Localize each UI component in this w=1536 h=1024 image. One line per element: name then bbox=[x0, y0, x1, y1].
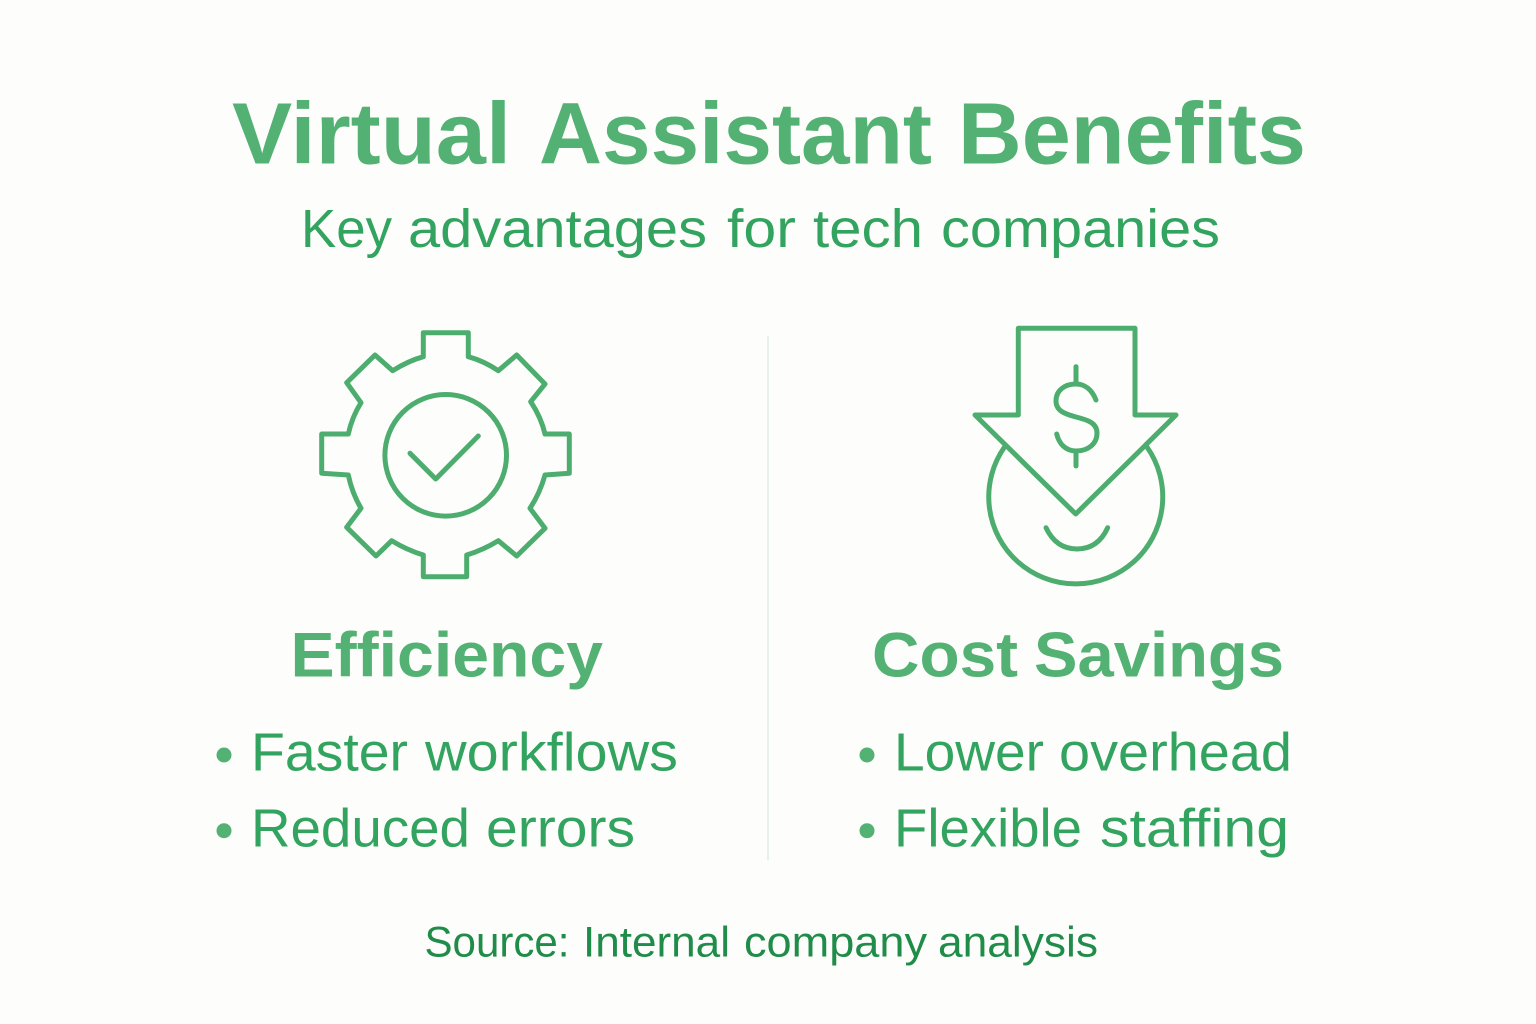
title: Virtual bbox=[232, 86, 511, 182]
list: efficiency points: workflows bbox=[424, 723, 678, 783]
heading: cost savings: Savings bbox=[1034, 621, 1284, 691]
title: Benefits bbox=[958, 86, 1306, 182]
source note: analysis bbox=[938, 919, 1098, 967]
icon: gear with check mark bbox=[322, 333, 569, 577]
list: cost savings points bbox=[860, 723, 1292, 859]
list: cost savings points: overhead bbox=[1059, 723, 1292, 783]
subtitle: Key bbox=[301, 199, 392, 259]
source note bbox=[424, 919, 1098, 967]
panel: efficiency bbox=[216, 333, 678, 859]
source note: company bbox=[744, 919, 928, 967]
subtitle: advantages bbox=[408, 199, 707, 259]
heading: cost savings: Cost bbox=[872, 621, 1018, 691]
source note: Internal bbox=[583, 919, 730, 967]
icon: down arrow with dollar and coin bbox=[975, 328, 1176, 584]
title: Assistant bbox=[539, 86, 932, 182]
list: efficiency points: errors bbox=[486, 799, 635, 859]
subtitle: for bbox=[727, 199, 796, 259]
subtitle bbox=[301, 199, 1220, 259]
list: efficiency points: Faster bbox=[251, 723, 408, 783]
list: efficiency points: Reduced bbox=[251, 799, 470, 859]
subtitle: companies bbox=[941, 199, 1220, 259]
heading: cost savings bbox=[872, 621, 1284, 691]
source note: Source: bbox=[424, 919, 570, 967]
list: cost savings points: staffing bbox=[1100, 799, 1289, 859]
heading: efficiency: Efficiency bbox=[290, 621, 603, 691]
list: efficiency points bbox=[216, 723, 678, 859]
list: cost savings points: Lower bbox=[894, 723, 1044, 783]
list: cost savings points: Flexible bbox=[894, 799, 1082, 859]
title bbox=[232, 86, 1306, 182]
subtitle: tech bbox=[813, 199, 923, 259]
panel: cost savings bbox=[860, 328, 1292, 859]
